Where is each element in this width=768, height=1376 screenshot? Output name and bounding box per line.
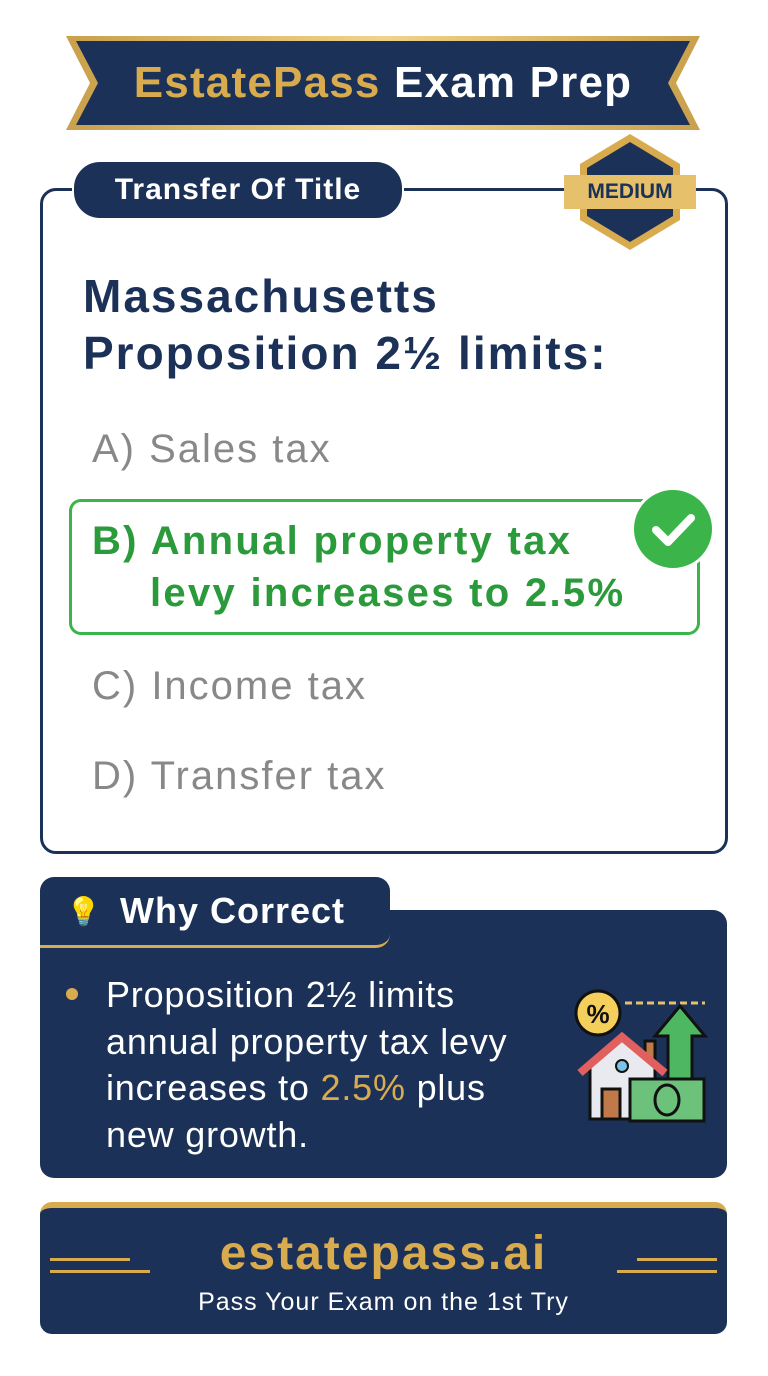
badge: medium — [564, 134, 696, 250]
icon: house tax growth: % — [586, 999, 610, 1029]
topic tab: Transfer Of Title — [115, 173, 361, 206]
question text: Proposition 2½ limits: — [83, 327, 608, 379]
icon: house tax growth — [574, 990, 708, 1122]
bullet text — [106, 974, 507, 1154]
bullet text: Proposition 2½ limits — [106, 974, 455, 1015]
bullet text: increases to 2.5% plus — [106, 1067, 486, 1108]
title banner: EstatePass Exam Prep — [134, 58, 632, 107]
footer: estatepass.ai — [220, 1227, 547, 1280]
footer: Pass Your Exam on the 1st Try — [198, 1288, 569, 1316]
badge: medium: MEDIUM — [587, 180, 673, 203]
tab: why correct: Why Correct — [120, 890, 345, 931]
question text: Massachusetts — [83, 270, 439, 322]
question text — [83, 270, 608, 379]
bullet text: annual property tax levy — [106, 1020, 507, 1062]
option B correct — [69, 499, 700, 635]
title banner — [66, 36, 700, 130]
tab: why correct — [40, 877, 390, 948]
topic tab — [72, 160, 404, 220]
option D: D) Transfer tax — [92, 754, 387, 798]
icon: light bulb: 💡 — [66, 896, 101, 927]
option B correct: levy increases to 2.5% — [150, 571, 625, 615]
option C: C) Income tax — [92, 664, 367, 708]
option B correct: B) Annual property tax — [92, 519, 572, 563]
bullet text: new growth. — [106, 1114, 309, 1154]
question card — [40, 188, 728, 854]
panel: why correct — [40, 910, 727, 1178]
option A: A) Sales tax — [92, 427, 332, 471]
icon: check — [631, 487, 715, 571]
footer — [40, 1202, 727, 1334]
